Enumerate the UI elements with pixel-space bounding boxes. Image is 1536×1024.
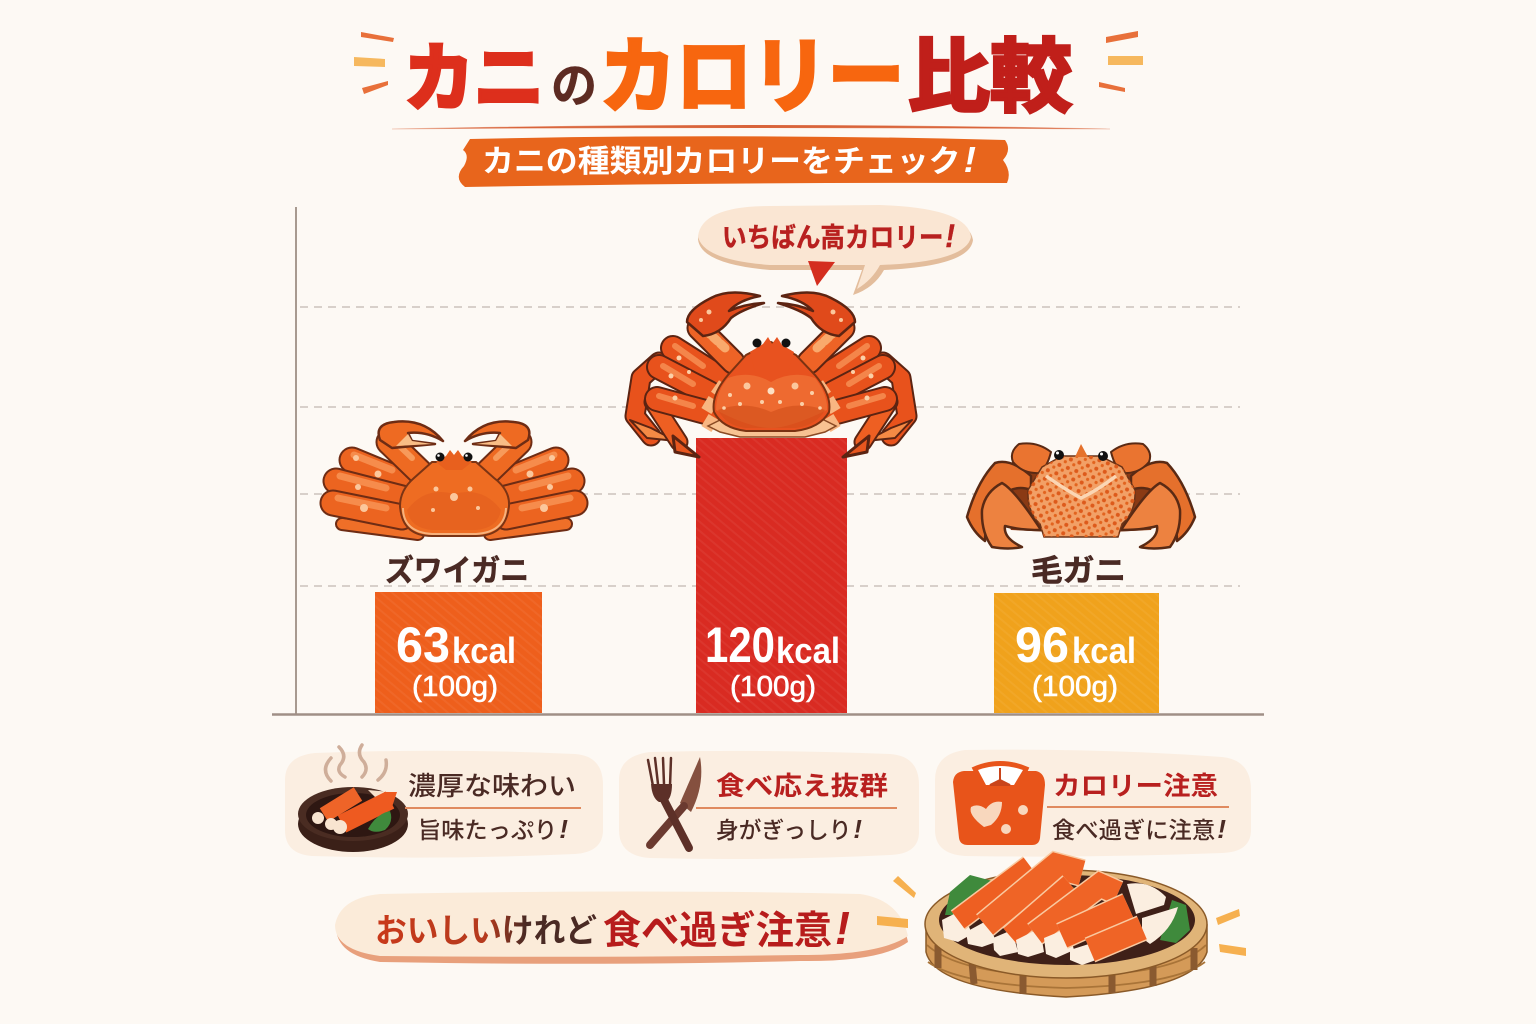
title text: 比較 (908, 33, 1072, 122)
title: right accent rays (1099, 31, 1143, 92)
card: 濃厚な味わい (285, 745, 603, 858)
bar: タラバガニ 120kcal: kcal (776, 630, 840, 671)
label: 毛ガニ: 毛ガニ (1031, 555, 1126, 588)
icon: banner accent rays (877, 876, 1246, 956)
bar: 毛ガニ 96kcal: 96 (1015, 617, 1069, 673)
bar: タラバガニ 120kcal: 120 (705, 617, 775, 673)
card heading: 食べ応え抜群 (716, 771, 888, 801)
icon: bathroom scale (953, 762, 1045, 845)
speech bubble: いちばん高カロリー: いちばん高カロリー! (722, 218, 955, 254)
title text: カロリー (600, 32, 904, 123)
bar: タラバガニ 120kcal (696, 438, 847, 713)
subtitle ribbon: カニの種類別カロリーをチェック ! (482, 139, 976, 180)
bar: タラバガニ 120kcal: (100g) (730, 671, 816, 703)
card: カロリー注意 (935, 750, 1251, 857)
title underline (392, 126, 1110, 129)
banner: おいしいけれど食べ過ぎ注意: 食べ過ぎ注意! (603, 902, 850, 954)
card: 食べ応え抜群 (619, 751, 919, 859)
speech bubble: いちばん高カロリー (698, 205, 973, 295)
crab leg pieces (942, 866, 1178, 965)
icon: crab legs on dark plate (298, 787, 408, 852)
title text (404, 32, 1072, 123)
title: left accent rays (354, 32, 394, 94)
bar: 毛ガニ 96kcal: (100g) (1032, 671, 1118, 703)
illustration: king crab on red bar (630, 292, 912, 457)
title text: の (551, 60, 597, 113)
chart axes and gridlines (272, 207, 1264, 714)
title text: カニ (404, 37, 544, 120)
card subtext: 食べ過ぎに注意! (1052, 814, 1226, 844)
bar: ズワイガニ 63kcal (375, 592, 542, 713)
title block (354, 31, 1143, 187)
illustration: hairy crab (967, 443, 1195, 548)
card heading: 濃厚な味わい (408, 771, 576, 801)
bar: ズワイガニ 63kcal: kcal (452, 630, 516, 671)
card subtext: 旨味たっぷり! (418, 814, 568, 844)
card subtext: 身がぎっしり! (716, 814, 862, 844)
bar: 毛ガニ 96kcal: kcal (1072, 630, 1136, 671)
banner: おいしいけれど食べ過ぎ注意: おいしいけれど (375, 912, 597, 949)
bar: ズワイガニ 63kcal: (100g) (412, 671, 498, 703)
label: ズワイガニ: ズワイガニ (385, 554, 529, 588)
icon: steam (326, 745, 386, 781)
bar: 毛ガニ 96kcal (994, 593, 1159, 713)
illustration: crab legs on wooden tray (925, 866, 1207, 997)
icon: fork and knife (648, 757, 701, 848)
illustration: snow crab (333, 421, 575, 536)
bar: ズワイガニ 63kcal: 63 (396, 617, 450, 673)
banner: おいしいけれど食べ過ぎ注意 (335, 892, 908, 964)
card heading: カロリー注意 (1053, 771, 1218, 801)
